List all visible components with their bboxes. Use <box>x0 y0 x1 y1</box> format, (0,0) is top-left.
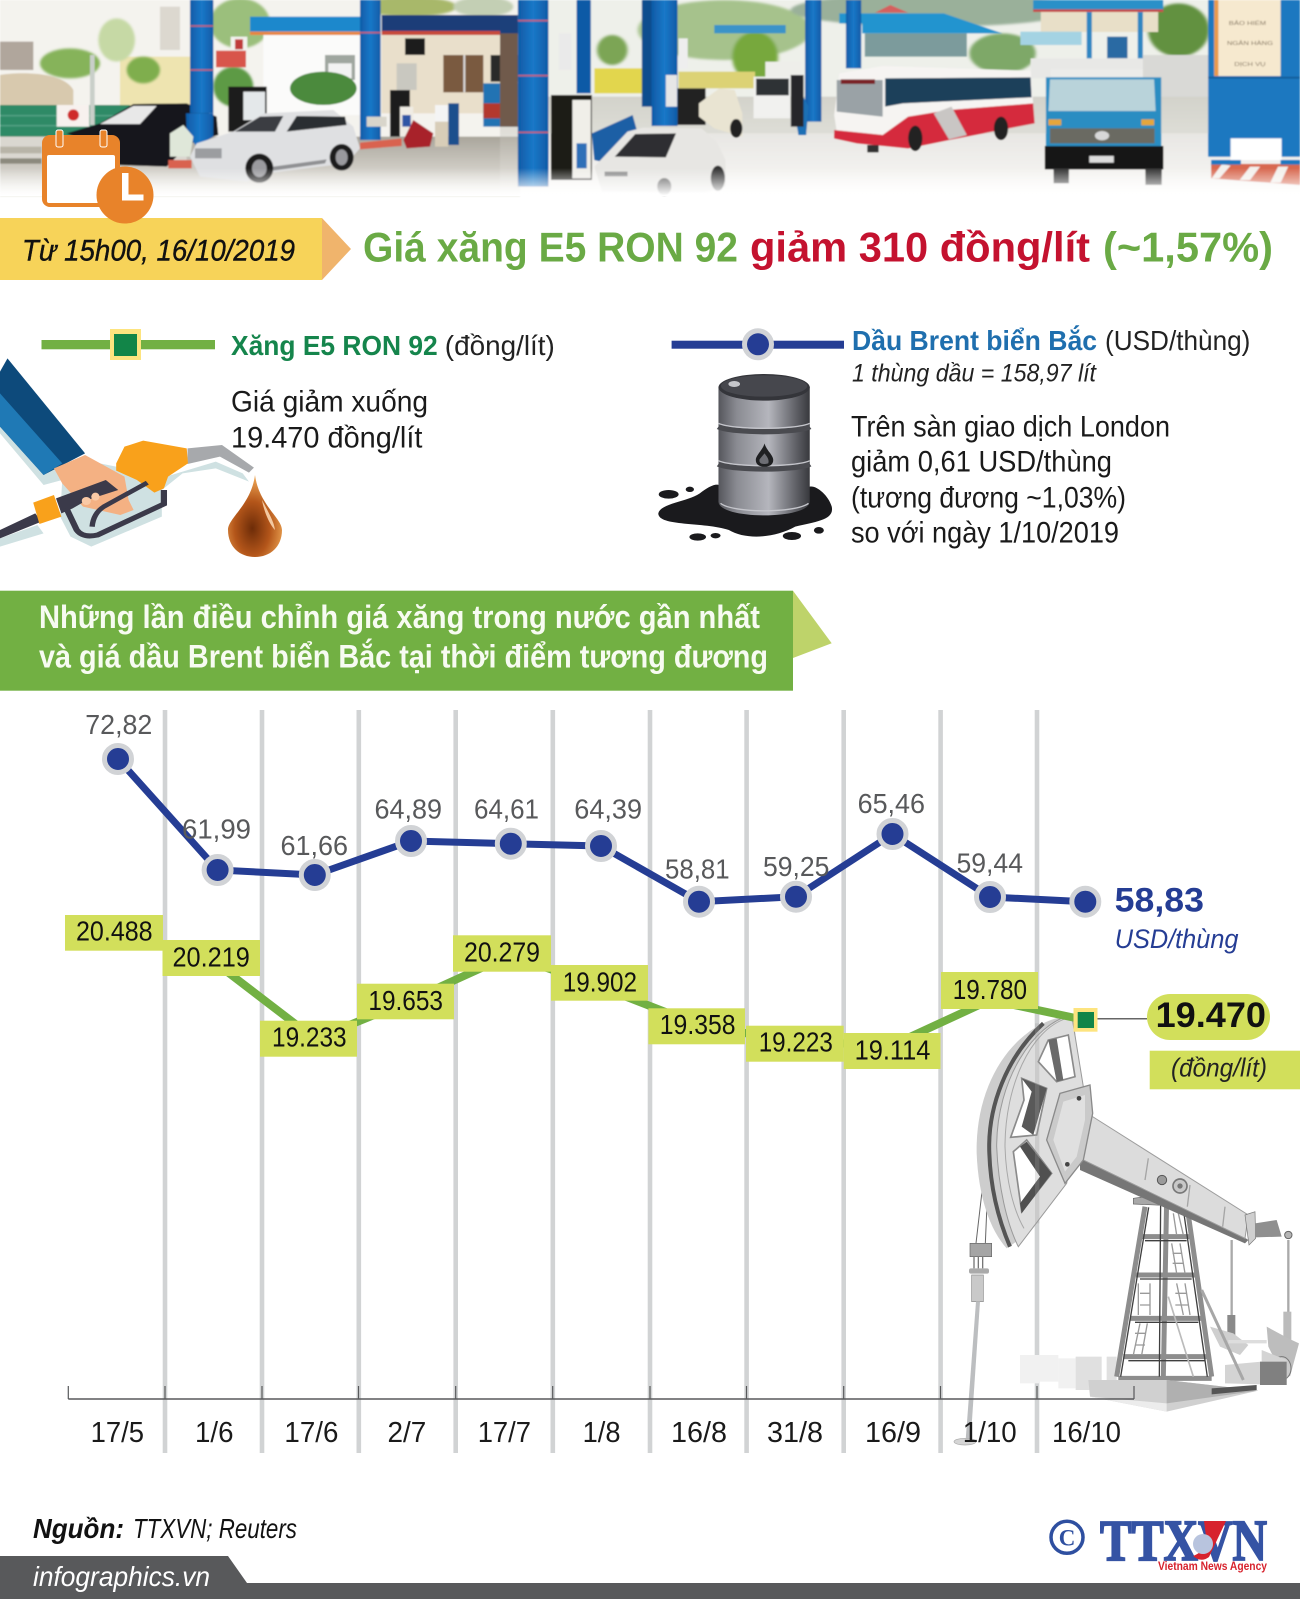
black SUV <box>67 103 218 167</box>
right half of photo, drawn in zoom coordinates: NGÂN HÀNG <box>1227 40 1273 47</box>
legend: petrol E5 RON 92 <box>42 329 555 361</box>
axis date labels: 17/7 <box>478 1417 531 1449</box>
text: petrol price falls: Giá giảm xuống <box>231 386 428 419</box>
right part of station building <box>382 35 520 113</box>
callout: final petrol price <box>1147 994 1300 1089</box>
icon: oil drop <box>228 475 282 557</box>
legend: Brent crude <box>672 325 1250 388</box>
axis date labels: 1/6 <box>195 1417 234 1449</box>
axis date labels: 31/8 <box>767 1417 823 1449</box>
data values: 64,39 <box>574 793 642 824</box>
axis date labels: 1/8 <box>583 1417 620 1449</box>
data points <box>104 746 1099 915</box>
text: petrol price falls <box>231 386 428 455</box>
roadside sign <box>1208 0 1300 157</box>
price label values: 19.114 <box>855 1034 930 1065</box>
text: Brent price on London exchange <box>851 411 1170 549</box>
chart gridlines <box>163 710 1039 1453</box>
callout: final Brent price: 58,83 <box>1115 882 1204 920</box>
text: Brent price on London exchange: giảm 0,61 USD/thùng <box>851 446 1112 479</box>
illustration: pumpjack <box>954 1015 1299 1445</box>
callout: final Brent price <box>1115 882 1238 954</box>
horse head <box>977 1015 1082 1248</box>
data values: 59,44 <box>956 848 1023 879</box>
data values: 64,89 <box>374 793 442 824</box>
axis date labels: 16/8 <box>671 1417 727 1449</box>
chart axis <box>68 1386 1134 1399</box>
final petrol marker <box>1074 1008 1098 1032</box>
data values <box>85 709 1023 884</box>
source <box>33 1513 297 1544</box>
banner: date <box>0 218 351 280</box>
title: giảm 310 đồng/lít <box>750 224 1090 270</box>
white van <box>699 88 742 137</box>
axis date labels: 17/5 <box>91 1417 144 1449</box>
legend: Brent crude: Dầu Brent biển Bắc <box>852 325 1097 356</box>
pumps <box>551 95 592 180</box>
section heading: recent adjustments <box>0 591 832 691</box>
price label boxes <box>65 915 1038 1069</box>
price label values: 19.902 <box>563 967 637 998</box>
source: Nguồn: <box>33 1513 124 1544</box>
logo: TTXVN: C <box>1059 1526 1075 1550</box>
data values: 61,99 <box>182 813 251 844</box>
legend: Brent crude: 1 thùng dầu = 158,97 lít <box>852 360 1097 388</box>
background canopies <box>875 5 908 13</box>
axis date labels: 16/9 <box>865 1417 921 1449</box>
axis date labels: 2/7 <box>388 1417 426 1449</box>
footer bar <box>0 1556 1300 1599</box>
white SUV <box>190 110 360 182</box>
legend: Brent crude: (USD/thùng) <box>1105 325 1250 356</box>
price label values: 19.223 <box>759 1027 833 1058</box>
right half of photo, drawn in zoom coordinates <box>500 0 1300 195</box>
tower <box>1117 1198 1212 1378</box>
legend: petrol E5 RON 92: (đồng/lít) <box>445 330 555 361</box>
people and motorbike <box>435 105 448 147</box>
data values: 64,61 <box>474 793 539 824</box>
axis date labels <box>91 1417 1121 1449</box>
base <box>1088 1380 1258 1412</box>
logo: TTXVN: Vietnam News Agency <box>1158 1561 1268 1573</box>
right half of photo, drawn in zoom coordinates: BẢO HIỂM <box>1229 20 1266 27</box>
data values: 61,66 <box>280 830 348 861</box>
callout: final petrol price: 19.470 <box>1156 996 1266 1035</box>
price label values: 19.358 <box>660 1009 736 1040</box>
line chart: Brent crude price <box>85 709 1099 915</box>
price label values: 19.780 <box>953 974 1027 1005</box>
icon: oil barrel with spill <box>658 374 832 541</box>
icon: fuel nozzle in hand <box>0 358 254 547</box>
text: petrol price falls: 19.470 đồng/lít <box>231 422 423 455</box>
price label values: 20.279 <box>464 937 540 968</box>
bus <box>834 66 1035 142</box>
line chart: E5 RON 92 petrol price <box>65 915 1147 1069</box>
text: Brent price on London exchange: Trên sàn giao dịch London <box>851 411 1170 444</box>
pillar 1 <box>190 0 213 113</box>
workers <box>592 115 638 163</box>
logo: TTXVN <box>1051 1508 1268 1573</box>
axis date labels: 16/10 <box>1052 1417 1121 1449</box>
section heading: recent adjustments: và giá dầu Brent biển Bắc tại thời điểm tương đương <box>39 638 768 674</box>
axis date labels: 1/10 <box>963 1417 1017 1449</box>
callout: final petrol price: (đồng/lít) <box>1171 1053 1267 1083</box>
price label values <box>76 916 1027 1065</box>
data values: 65,46 <box>858 788 925 819</box>
data values: 72,82 <box>85 709 152 740</box>
price label values: 20.488 <box>76 916 153 947</box>
braces and counterweights <box>1228 1240 1235 1327</box>
price label values: 20.219 <box>172 942 250 973</box>
photo: petrol station header <box>0 0 1300 200</box>
axis date labels: 17/6 <box>284 1417 338 1449</box>
data values: 58,81 <box>665 853 730 884</box>
left half of photo, drawn in 3x coordinates <box>0 0 521 197</box>
title: Giá xăng E5 RON 92 <box>363 224 738 270</box>
price label values: 19.653 <box>368 985 443 1016</box>
text: Brent price on London exchange: (tương đương ~1,03%) <box>851 481 1126 514</box>
pillar 2 <box>360 0 381 140</box>
small white car <box>594 128 726 193</box>
section heading: recent adjustments: Những lần điều chỉnh giá xăng trong nước gần nhất <box>39 599 760 635</box>
right half of photo, drawn in zoom coordinates: DỊCH VỤ <box>1234 62 1266 68</box>
price label values: 19.233 <box>272 1022 347 1053</box>
icon: calendar and clock <box>42 130 154 224</box>
blue truck <box>1051 69 1143 79</box>
text: Brent price on London exchange: so với ngày 1/10/2019 <box>851 516 1119 549</box>
title: (~1,57%) <box>1103 224 1273 270</box>
source: TTXVN; Reuters <box>133 1513 297 1544</box>
banner: date: Từ 15h00, 16/10/2019 <box>22 234 295 268</box>
callout: final Brent price: USD/thùng <box>1115 924 1238 954</box>
beam <box>1080 1157 1248 1243</box>
title <box>363 224 1273 270</box>
legend: petrol E5 RON 92: Xăng E5 RON 92 <box>231 330 438 361</box>
data values: 59,25 <box>763 851 829 882</box>
building <box>263 35 361 115</box>
rod and hanger <box>976 1180 987 1243</box>
pillars <box>518 0 548 187</box>
white truck <box>765 62 801 78</box>
logo: TTXVN: TTXVN <box>1100 1508 1267 1573</box>
footer bar: infographics.vn <box>33 1561 210 1592</box>
